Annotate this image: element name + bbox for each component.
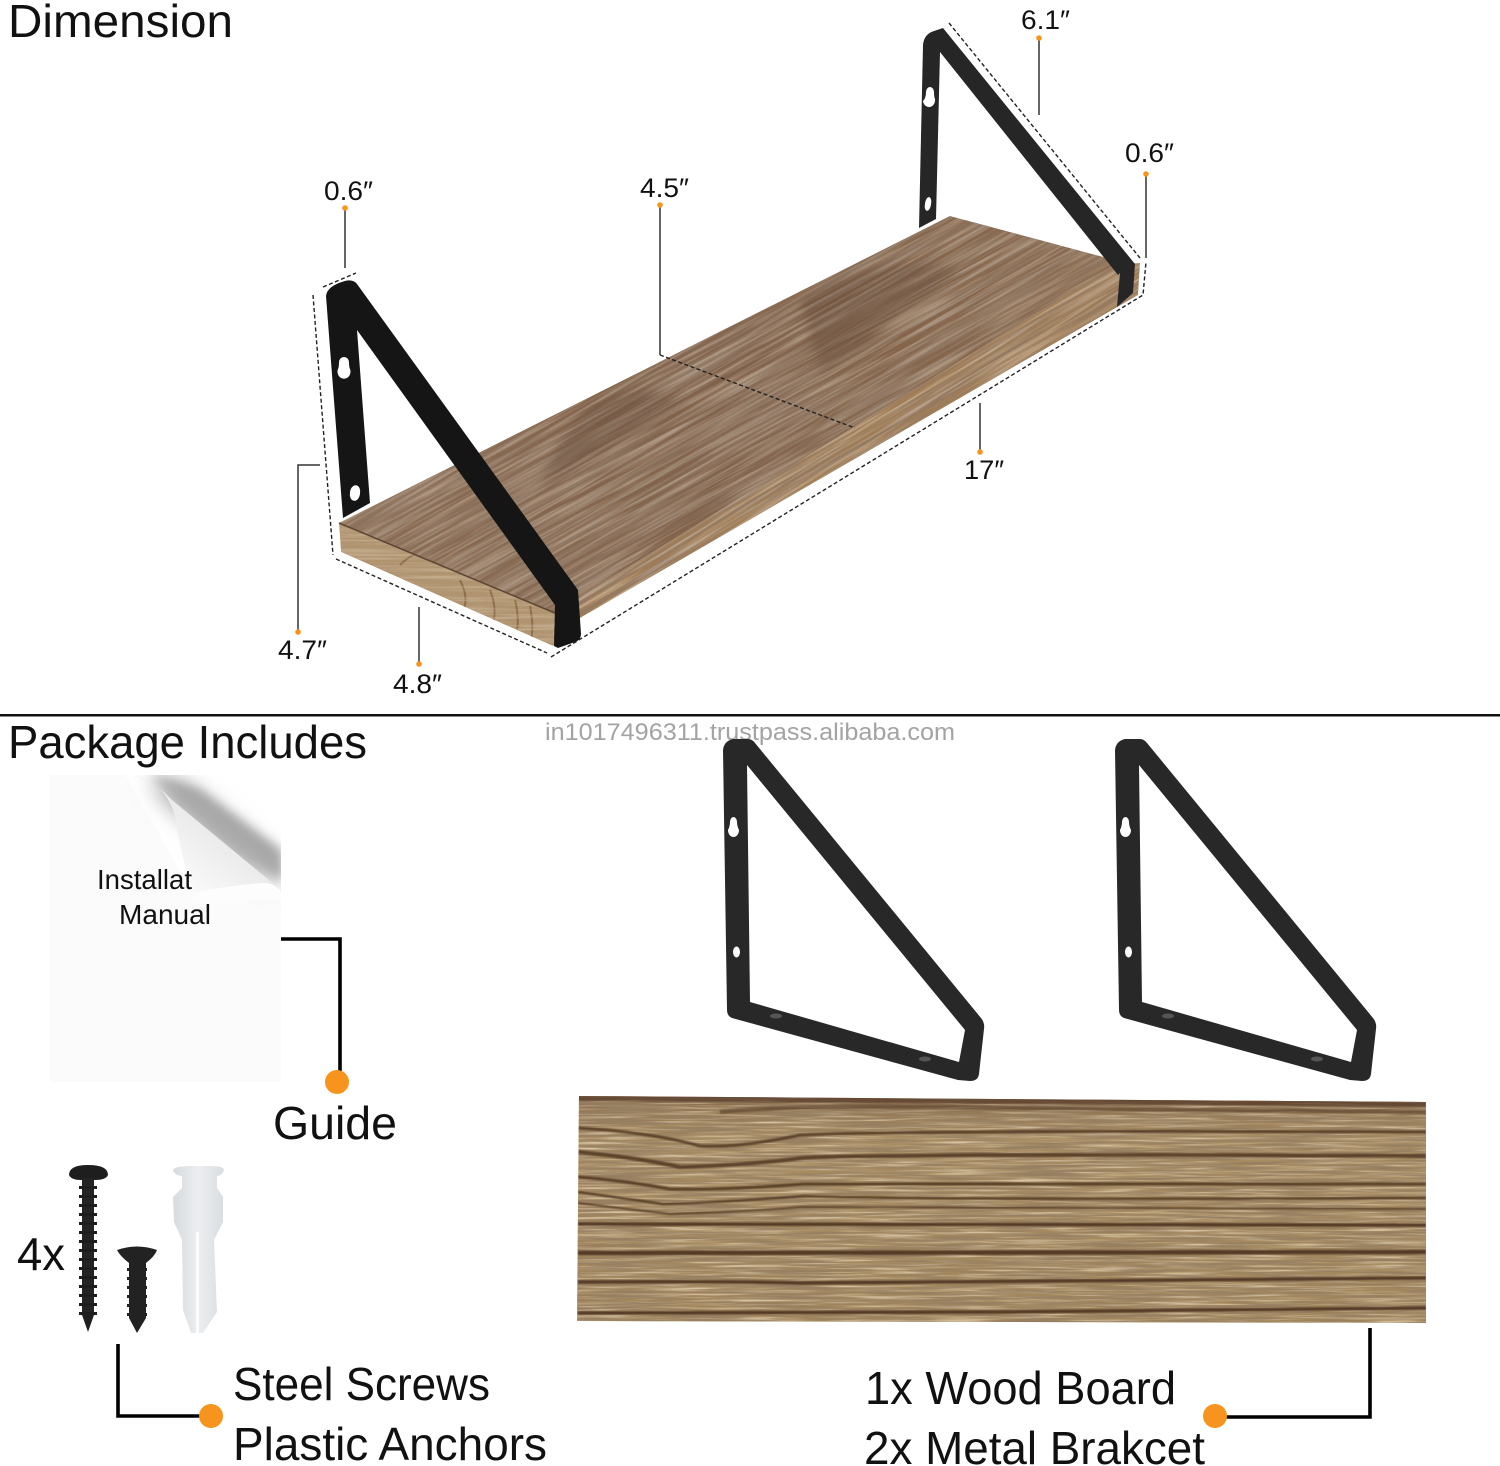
floating shelf illustration <box>326 28 1140 648</box>
label: 4x: 4x <box>17 1228 65 1280</box>
connector: manual to Guide <box>281 939 349 1094</box>
label: Steel Screws, Plastic Anchors: Steel Screws <box>233 1358 490 1410</box>
left bracket <box>326 280 581 648</box>
heading: Package Includes: Package Includes <box>8 716 367 768</box>
icon: long screw <box>69 1165 108 1332</box>
watermark: in1017496311.trustpass.alibaba.com <box>545 719 955 746</box>
shelf board: end face <box>339 522 555 647</box>
manual title: Installat <box>97 864 192 895</box>
wood board <box>575 1094 1430 1326</box>
dimension leader: 0.6 in right <box>1125 138 1174 258</box>
dashed dimension guides <box>313 23 1146 657</box>
dimension leader: 6.1 in <box>1021 5 1070 115</box>
dimension leader: 4.8 in: 4.8″ <box>393 669 442 699</box>
label: 1x Wood Board, 2x Metal Brakcet <box>864 1362 1205 1466</box>
shelf edge shadow <box>339 523 555 613</box>
manual title: Manual <box>119 899 211 930</box>
connector: board to label <box>1203 1328 1370 1428</box>
manual title <box>100 869 210 924</box>
label: Guide: Guide <box>273 1097 397 1149</box>
page curl <box>140 775 281 890</box>
dimension leader: 0.6 in right: 0.6″ <box>1125 138 1174 168</box>
dimension leader: 17 in <box>964 403 1004 485</box>
dimension leader: 6.1 in: 6.1″ <box>1021 5 1070 35</box>
installation manual sheet <box>100 775 281 924</box>
dimension leader: 4.5 in: 4.5″ <box>640 173 689 203</box>
icon: plastic anchor <box>173 1166 224 1334</box>
right bracket <box>919 28 1135 307</box>
shelf board: top face <box>340 216 1112 612</box>
shelf board: front face <box>553 263 1140 646</box>
metal bracket 1 <box>723 739 984 1081</box>
dimension leader: 4.5 in <box>640 173 689 355</box>
dimension leader: 0.6 in left <box>324 176 373 268</box>
connector: screws to label <box>118 1344 223 1428</box>
icon: short screw <box>117 1246 157 1333</box>
label: 1x Wood Board, 2x Metal Brakcet: 1x Wood Board <box>865 1362 1176 1414</box>
dimension leader: 4.7 in <box>278 465 327 665</box>
dimension leader: 17 in: 17″ <box>964 455 1004 485</box>
dimension leader: 4.8 in <box>393 607 442 699</box>
dimension leader: 4.7 in: 4.7″ <box>278 635 327 665</box>
paper page <box>50 775 281 1082</box>
dimension leader: 0.6 in left: 0.6″ <box>324 176 373 206</box>
label: Steel Screws, Plastic Anchors <box>233 1358 547 1466</box>
metal bracket 2 <box>1115 739 1376 1081</box>
